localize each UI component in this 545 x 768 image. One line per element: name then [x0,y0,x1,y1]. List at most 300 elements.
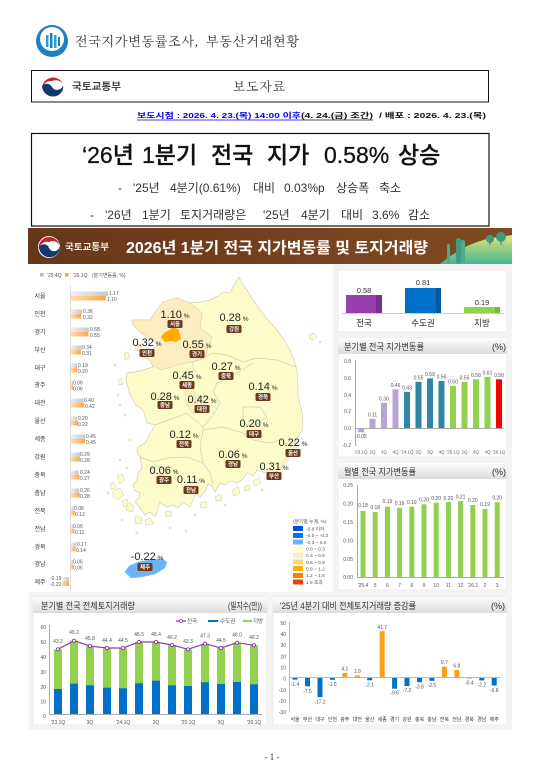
bar: capital area 0.81 [405,278,441,328]
y axis: 0.4 [344,393,351,399]
region names: 전북 [34,507,46,515]
region names: 경북 [34,544,46,551]
x axis: 12 [458,583,464,589]
y axis [40,625,262,720]
line values: 44.4 [102,638,112,644]
bar values: -2.1 [365,682,374,688]
map: Gyeonggi and Incheon [132,298,212,370]
main headline: 전국 [211,142,253,168]
bar values: 0.19 [383,499,392,505]
line values: 46.2 [167,635,177,641]
region names: 광주 [34,382,46,389]
bar values: 9.7 [441,660,448,666]
map: region badge names: 전북 [179,440,189,448]
sub headline 1: 상승폭 [336,181,369,195]
bar values: 0.20 [468,498,478,504]
map: region badge names [140,320,298,571]
bar values: -2.5 [428,683,436,689]
y axis: 0.2 [344,409,351,415]
map: regional values: 1.10 % [160,309,190,321]
line values: 48.5 [134,632,144,638]
x axis: 3 [496,583,499,589]
y axis: 40 [280,632,286,638]
bar values: 0.50 [448,380,458,386]
x axis [354,450,506,454]
bar values: 4.1 [341,666,348,672]
line values: 47.3 [200,634,210,640]
left bar chart legend: '25.4Q [47,273,62,279]
bar values: 1.9 [354,669,361,675]
bar values: 1.17 [109,291,119,297]
bar: nationwide 0.58 [346,286,382,328]
bar values: -0.22 [50,582,62,588]
x axis: 7 [398,583,401,589]
x axis: '24.1Q [116,720,130,726]
x axis: 2 [484,583,487,589]
map: region badge names: 강원 [229,325,239,333]
region names: 대전 [34,399,46,407]
y axis: 10 [40,700,46,706]
right column background [333,264,512,592]
bar values: 0.27 [80,476,90,482]
bar values: 0.06 [73,566,83,572]
x axis: 6 [386,583,389,589]
bar values: -0.19 [50,576,62,582]
bar values: 0.11 [368,412,377,418]
bar values: 0.19 [407,500,417,506]
map: province borders [140,353,296,483]
map: region badge names: 광주 [159,476,169,484]
y axis: 0.25 [343,483,353,489]
bar values: 0.34 [82,345,92,351]
bar values: 0.19 [480,502,490,508]
gray bars for 2025 Q4 [63,292,108,582]
map: region badge names: 충남 [160,401,170,409]
map legend: -0.3 ~ 0.0 [306,540,327,546]
bar: provinces 0.19: 지방 [474,318,490,328]
region names: 울산 [34,417,46,425]
x axis: '25.1Q [181,720,195,726]
x axis: 2Q [461,450,468,454]
bar: capital area 0.81: 0.81 [416,278,430,287]
bar values: 0.55 [90,333,100,339]
panel heading: 분기별 전국 지가변동률 [344,342,424,352]
x axis: 3Q [473,450,479,454]
map: region badge names: 인천 [142,349,152,357]
region names: 충북 [34,471,46,479]
x axis [51,720,261,726]
bar values: 0.06 [73,560,83,566]
region names: 강원 [34,453,46,461]
bar values: 0.40 [84,398,94,404]
bar values [355,370,504,440]
x axis: 10 [433,583,439,589]
bar values: 0.18 [358,503,368,509]
y axis [279,621,501,716]
bar values: 0.58 [471,373,481,379]
main headline: 0.58% [324,142,389,168]
x axis region names: 제주 [490,716,499,723]
map: regional values: 0.45 % [172,370,202,382]
x axis: 11 [446,583,451,589]
y axis: 0 [283,676,286,682]
x axis: '23.1Q [51,720,65,726]
panel heading: 분기별 전국 전체토지거래량 [41,600,135,611]
map: west and south islands [107,333,321,534]
map: region badge names: 부산 [269,472,279,480]
map: Seoul [161,327,181,342]
legend: 지방 [253,617,263,625]
panel: quarterly land price change [338,338,507,457]
bar values: -2.2 [477,682,486,688]
map: regional values: 0.28 % [219,312,249,324]
map: region badge names: 전남 [186,486,196,494]
x axis: 4Q [392,450,399,454]
bar values: 0.55 [414,376,424,382]
sub headline 2: '25년 [263,208,290,222]
region names: 제주 [34,578,46,586]
x axis: '26.1Q [492,450,506,454]
bar values: 0.20 [78,369,88,375]
region names: 경기 [34,328,46,336]
line values: 46.2 [249,635,259,641]
region names: 경남 [34,560,46,568]
main headline: 상승 [398,142,440,168]
map legend: 0.3 ~ 0.6 [306,553,325,559]
x axis: 3Q [218,720,224,726]
page number: - 1 - [264,752,280,762]
bars [360,501,500,577]
map: regional values: 0.28 % [150,391,180,403]
x axis: 4Q [484,450,491,454]
map: regional values: 0.22 % [278,437,308,449]
map: region badge names: 대구 [249,430,259,438]
legend: 수도권 [220,617,235,625]
map: regional values: 0.11 % [177,474,205,486]
release date line: 보도시점 : 2026. 4. 23.(목) 14:00 이후 [137,110,301,120]
map legend: 1.2 ~ 1.5 [306,573,325,579]
y axis [343,483,504,581]
release date line: / 배포 : 2026. 4. 23.(목) [379,110,487,120]
x axis region names: 인천 [328,716,337,723]
header title: 부동산거래현황 [206,34,299,49]
x axis region names: 충남 [427,716,437,723]
x axis: 3Q [427,450,433,454]
header title [75,34,299,49]
panel: region summary bars [338,270,507,332]
bar values: 6.8 [453,664,460,670]
x axis region names: 대전 [353,716,362,723]
sub headline 2: 1분기 [142,208,171,222]
bar values: 0.12 [75,512,85,518]
region names: 전남 [34,525,46,533]
panel: monthly land price change [338,463,507,590]
panel heading: 월별 전국 지가변동률 [344,466,416,477]
sub headline 2: '26년 [105,208,132,222]
bar values: 0.59 [425,372,435,378]
line values: 44.5 [216,638,226,644]
bar values: -9.6 [390,690,399,696]
map legend: 0.6 ~ 0.9 [306,560,325,566]
map: regional values: 0.20 % [239,418,269,430]
icon: ministry taegeuk logo [40,74,64,98]
region names [34,292,46,586]
bar: provinces 0.19: 0.19 [475,298,489,307]
bar values: 0.20 [419,498,429,504]
bar: nationwide 0.58: 전국 [356,318,372,328]
bar values: -0.4 [465,680,474,686]
region names: 세종 [34,435,46,443]
x axis: 3Q [153,720,159,726]
release date line [137,110,487,120]
left bar chart legend: '26.1Q [73,273,88,279]
map legend: 1.5 초과 [306,579,323,586]
press release box [32,70,488,102]
x axis: 2Q [415,450,422,454]
y axis: -20 [279,699,286,705]
map legend: 0.9 ~ 1.2 [306,566,325,572]
bar: provinces 0.19 [464,298,500,328]
bar values [291,625,499,706]
sub headline 1: - [118,181,122,195]
map legend: 0.0 ~ 0.3 [306,546,325,552]
orange bars for 2026 Q1 [62,296,106,586]
region names: 서울 [34,292,46,300]
bar values: 0.61 [483,370,493,376]
sub headline 2: 대비 [341,208,363,222]
headline box [32,134,489,226]
map: Jeju island [125,559,167,578]
map: region badge names: 세종 [182,381,192,389]
line values: 48.0 [232,632,242,638]
bar values: 0.26 [80,488,90,494]
y axis: 0.10 [343,538,353,544]
x axis: '23.1Q [354,450,368,454]
sub headline 1: 대비 [253,181,275,195]
map: regional values: 0.55 % [182,339,212,351]
map: region badge names: 제주 [140,563,150,571]
bar values: 0.36 [83,309,93,315]
banner ministry name: 국토교통부 [65,242,109,252]
bar values: 0.43 [402,386,412,392]
x axis region names: 전북 [440,716,449,723]
y axis: 20 [40,685,46,691]
x axis: 8 [410,583,413,589]
unit: (%) [491,601,505,611]
bar values: 41.7 [377,625,387,631]
main headline: 1분기 [142,142,197,168]
sub headline 1: 0.03%p [284,181,325,195]
sub headline 2: 감소 [408,208,430,222]
bar: capital area 0.81: 수도권 [411,318,435,328]
main headline: ‘26년 [82,142,134,168]
x axis: '25.1Q [446,450,460,454]
map: region name badges [138,320,300,571]
line values: 48.4 [151,632,161,638]
y axis: -0.2 [342,443,351,449]
x axis [358,583,499,589]
legend [176,617,263,625]
bars: increases [342,631,459,678]
region names: 인천 [34,310,46,318]
bar values: 0.42 [85,404,95,410]
map legend: -0.6 ~ -0.3 [306,533,328,539]
x axis region names: 충북 [415,716,424,723]
x axis region names: 대구 [315,716,325,723]
map: regional values: 0.32 % [132,337,162,349]
bars [358,377,502,432]
panel heading: '25년 4분기 대비 전체토지거래량 증감률 [280,600,416,611]
bar values: 0.31 [82,351,92,357]
press release label: 보도자료 [233,79,285,94]
bar values: 0.24 [80,470,90,476]
map: regional values: 0.14 % [248,381,278,393]
bar values: 0.20 [444,496,453,502]
bar values: 0.32 [83,315,93,321]
x axis region names: 경기 [390,716,399,723]
bar values: -7.5 [303,689,312,695]
bar values: 0.20 [431,496,441,502]
line values: 49.2 [69,630,79,636]
bar values: 0.20 [492,496,502,502]
x axis region names [290,716,499,723]
x axis region names: 경북 [465,716,474,723]
map legend: (분기별 누계, %) [293,518,327,525]
x axis region names: 세종 [378,716,387,723]
bar values: 0.58 [494,373,504,379]
y axis [342,359,504,449]
x axis: 5 [374,583,377,589]
map legend: -0.6 이하 [306,526,325,532]
map: region badge names: 경기 [192,350,202,358]
map: region badge names: 충북 [221,372,231,380]
bar values: 0.14 [76,548,86,554]
bar values: 0.20 [78,416,88,422]
bars: provinces [54,641,258,714]
bar values: 0.30 [379,396,389,402]
bar values: 0.06 [73,380,83,386]
y axis: -30 [279,710,286,716]
panel: quarterly land transaction volume [33,597,267,726]
unit: (%) [492,467,506,477]
left chart: regional quarterly change bars [34,285,119,590]
map: regional values: 0.27 % [211,361,241,373]
x axis: '26.1 [467,583,478,589]
bar values: -7.2 [403,688,412,694]
ministry name: 국토교통부 [72,81,121,93]
bar values: 0.58 [90,327,100,333]
bar values: 0.18 [370,505,380,511]
bar values: -6.8 [490,688,499,694]
y axis: 0.8 [344,359,351,365]
map: region badge names: 울산 [288,449,298,457]
map: regional values [131,309,308,563]
bar values: 0.56 [437,374,447,380]
map: region badge names: 경남 [228,460,238,468]
y axis: 50 [40,640,46,646]
release date line: (4. 24.(금) 조간) [301,110,374,120]
bar values: -0.05 [355,434,367,440]
bar values [358,494,502,511]
y axis: 20 [280,654,286,660]
y axis: 50 [280,621,286,627]
x axis: 3Q [381,450,387,454]
y axis: 0 [43,714,46,720]
bar values: 0.28 [80,494,90,500]
x axis region names: 울산 [365,716,375,723]
line: nationwide total [56,639,256,651]
header title: 전국지가변동률조사, [75,34,198,49]
x axis region names: 경남 [477,716,487,723]
sub headline 1: '25년 [133,181,160,195]
bar values: 0.22 [78,422,88,428]
bar values: 0.29 [80,452,90,458]
line values: 43.3 [183,639,193,645]
icon: hills and trees [440,232,512,264]
map: regional values: 0.06 % [218,449,248,461]
panel: land transaction change by region [273,597,507,725]
line values: 43.2 [53,639,63,645]
bar values: 0.06 [73,524,83,530]
y axis: 0.00 [343,575,353,581]
map: Busan and Ulsan [278,452,292,470]
bar values: 0.46 [391,383,401,389]
y axis: 0.6 [344,376,351,382]
banner [28,228,512,264]
unit: (필지수(만)) [228,600,262,611]
map: regional values: 0.06 % [149,465,179,477]
bar values: 1.10 [107,297,117,303]
main headline: 지가 [267,142,309,168]
x axis: '24.1Q [400,450,414,454]
y axis: 0.20 [343,502,353,508]
icon: banner taegeuk logo [38,236,60,258]
region names: 부산 [34,346,46,354]
y axis: 10 [280,666,286,672]
y axis: 40 [40,655,46,661]
line values: 45.8 [85,636,95,642]
bar values: 0.06 [73,386,83,392]
bar values: -3.8 [415,684,424,690]
x axis region names: 부산 [303,716,312,723]
x axis: '25.4 [358,583,369,589]
map of Korea [107,277,321,578]
bar values: 0.08 [74,506,84,512]
bar values: 0.19 [395,501,405,507]
bar values: 0.55 [460,376,470,382]
y axis: 0.15 [343,520,353,526]
y axis: 60 [40,625,46,631]
map: region badge names: 서울 [170,320,180,328]
map: mainland [126,277,303,517]
x axis region names: 강원 [402,716,412,723]
bars: decreases [292,678,497,697]
map: regional values: 0.31 % [259,461,289,473]
sub headline 1: 축소 [379,181,401,195]
icon: statistics agency emblem [36,25,68,57]
y axis: 0.05 [343,557,353,563]
x axis region names: 서울 [290,716,300,723]
map: regional values: 0.42 % [187,394,217,406]
bar values: 0.21 [456,494,466,500]
sub headline 2: 토지거래량은 [180,208,246,222]
bar values: -17.2 [314,700,326,706]
x axis: 2Q [369,450,376,454]
unit: (%) [492,342,506,352]
legend: 전국 [187,617,197,625]
map: Sejong and Daejeon [185,383,201,413]
line values: 44.5 [118,638,128,644]
